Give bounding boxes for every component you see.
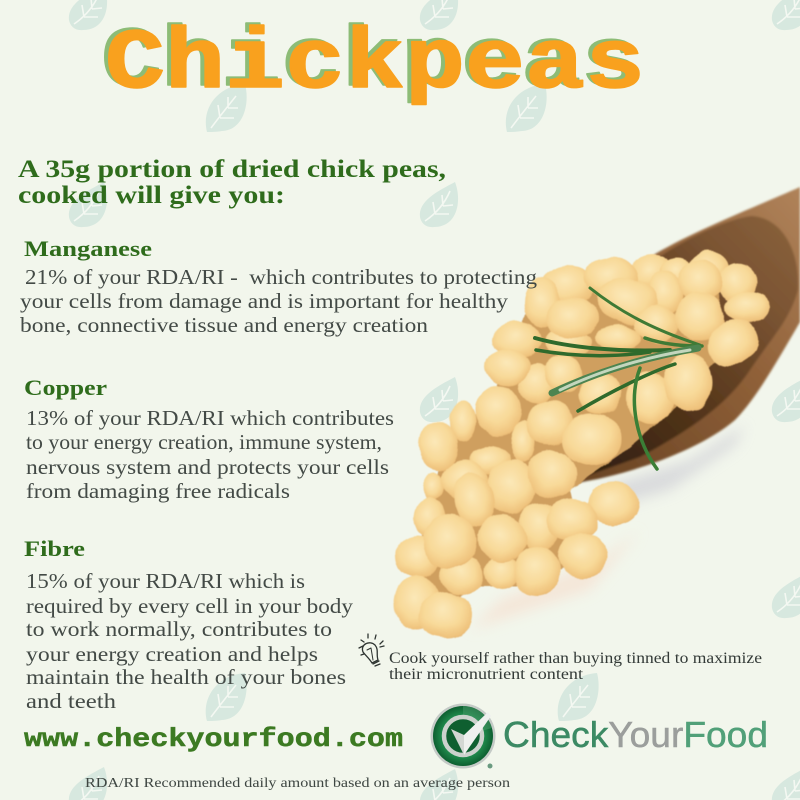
text: fibre body: to work normally, contributes to xyxy=(26,617,332,641)
section: fibre xyxy=(24,536,354,713)
text: fibre body: and teeth xyxy=(26,689,117,713)
icon: light bulb xyxy=(359,634,384,666)
logo mark xyxy=(430,704,496,768)
text: copper body: nervous system and protects your cells xyxy=(26,455,389,479)
spoon shadow xyxy=(600,425,745,505)
text: copper body: from damaging free radicals xyxy=(26,479,290,503)
text: copper body: 13% of your RDA/RI which contributes xyxy=(26,406,394,430)
text: fibre body xyxy=(26,569,354,713)
section: copper xyxy=(24,375,394,503)
section: manganese xyxy=(20,236,538,337)
text: manganese body: bone, connective tissue and energy creation xyxy=(20,313,429,337)
intro heading: A 35g portion of dried chick peas, xyxy=(18,156,446,183)
intro heading xyxy=(18,156,446,209)
heading: manganese: Manganese xyxy=(24,236,152,261)
title: Chickpeas xyxy=(101,14,641,111)
title: Chickpeas xyxy=(105,16,645,113)
heading: fibre: Fibre xyxy=(24,536,85,561)
text: fibre body: 15% of your RDA/RI which is xyxy=(26,569,305,593)
rosemary sprig xyxy=(535,288,702,469)
text: fibre body: your energy creation and helps xyxy=(26,642,318,666)
text: copper body: to your energy creation, immune system, xyxy=(26,430,382,454)
chickpeas xyxy=(394,251,770,638)
text: fibre body: maintain the health of your bones xyxy=(26,665,346,689)
website url: www.checkyourfood.com xyxy=(24,724,403,754)
shaded gaps between chickpeas xyxy=(410,272,730,620)
logo wordmark: CheckYourFood xyxy=(503,714,768,755)
tip text: Cook yourself rather than buying tinned to maximize xyxy=(389,650,762,667)
intro heading: cooked will give you: xyxy=(18,182,285,209)
image: chickpeas on wooden spoon xyxy=(394,187,800,638)
heading: copper: Copper xyxy=(24,375,107,400)
pea shadow xyxy=(470,530,640,630)
logo: CheckYourFood xyxy=(430,704,768,768)
text: fibre body: required by every cell in your body xyxy=(26,594,354,618)
text: manganese body xyxy=(20,265,538,337)
tip text xyxy=(389,650,762,683)
tip text: their micronutrient content xyxy=(389,666,584,683)
text: copper body xyxy=(26,406,394,503)
text: manganese body: your cells from damage and is important for healthy xyxy=(20,289,509,313)
text: manganese body: 21% of your RDA/RI - which contributes to protecting xyxy=(25,265,538,289)
footnote: RDA/RI Recommended daily amount based on an average person xyxy=(85,776,510,791)
wooden spoon xyxy=(520,187,800,483)
